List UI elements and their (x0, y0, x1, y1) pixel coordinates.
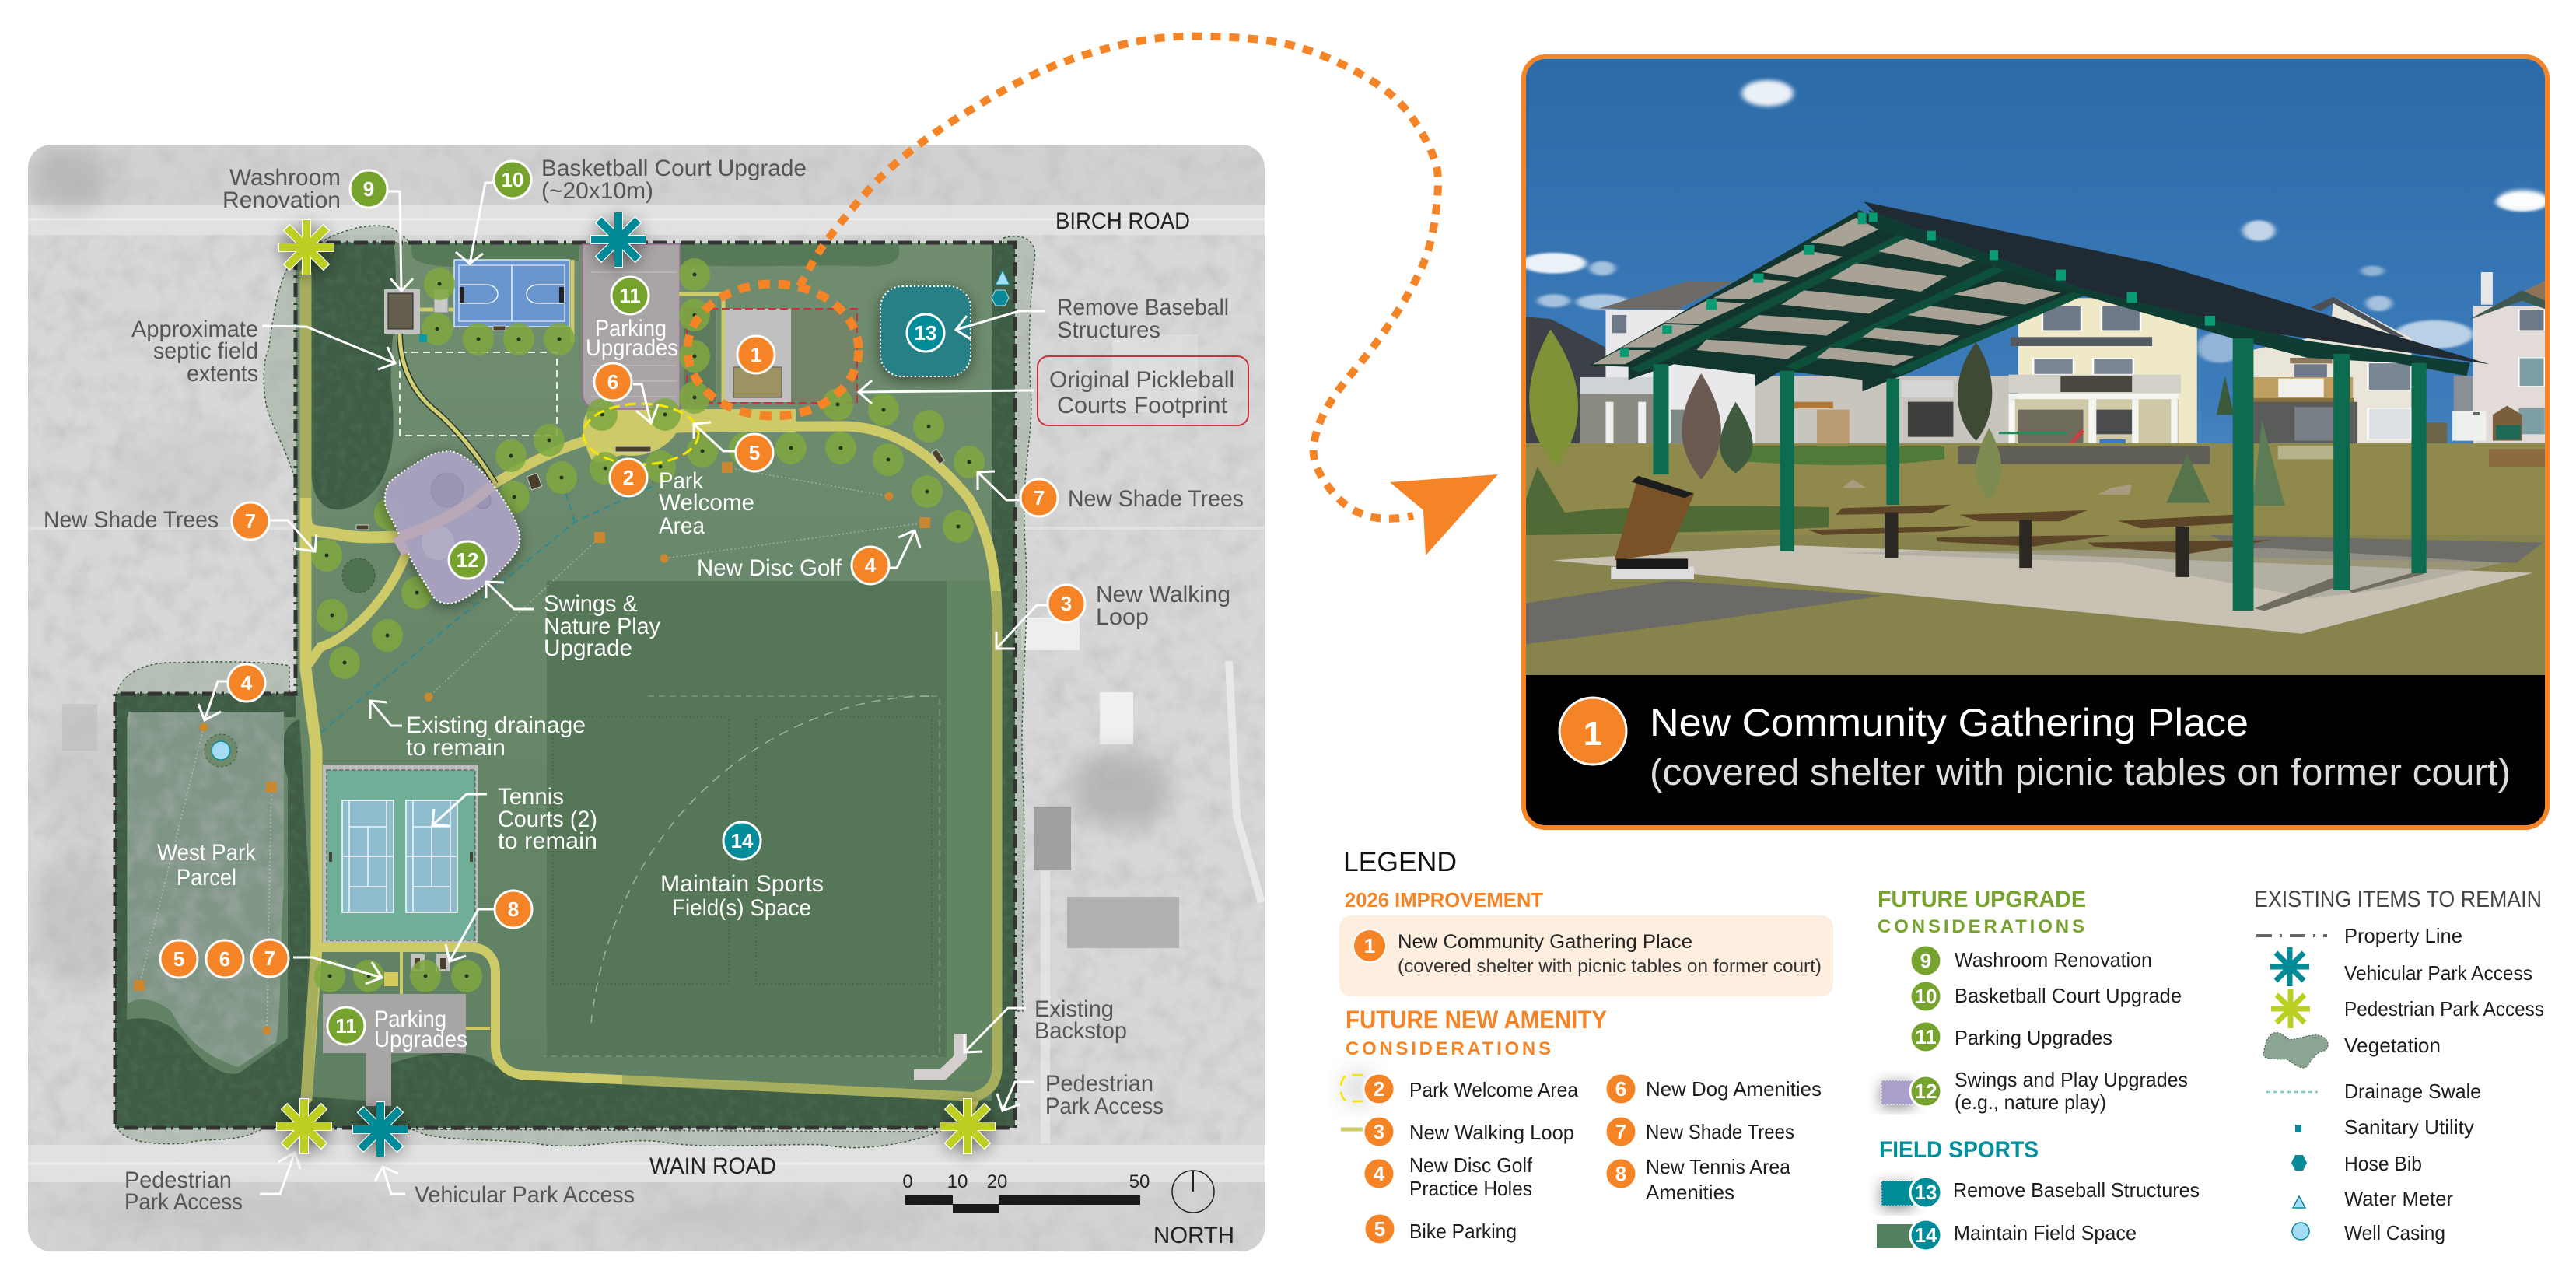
section: existing items to remain: Pedestrian Park Access (2344, 997, 2544, 1020)
section: future new amenity: 8 (1615, 1162, 1626, 1185)
label: septic field: extents (187, 361, 258, 387)
icon: vehicular access north (590, 212, 646, 268)
label: new walking loop: Loop (1096, 604, 1149, 630)
dotted ring around gathering place (688, 284, 859, 416)
background houses (1505, 193, 2551, 451)
panel: photo of community gathering shelter (1505, 57, 2576, 828)
marker 3: 3 (1061, 592, 1072, 615)
park base (115, 243, 1015, 1128)
north tree band (411, 243, 899, 268)
arrow: west disc golf (198, 681, 228, 720)
section: future new amenity: Amenities (1646, 1181, 1734, 1204)
label: washroom renovation: Washroom (229, 165, 341, 191)
narrow washroom path (400, 333, 495, 484)
section: future upgrade: 12 (1915, 1080, 1937, 1103)
section: 2026 improvement: 2026 IMPROVEMENT (1345, 888, 1543, 912)
caption marker 1 (1559, 698, 1626, 765)
marker 9: 9 (363, 177, 374, 201)
swings and nature play area (385, 451, 520, 604)
vegetation edges (117, 226, 1035, 1148)
section: field sports: Remove Baseball Structures (1953, 1178, 2200, 1202)
label: west park parcel (157, 840, 257, 891)
arrow: tennis amenities (446, 909, 495, 961)
disc golf tees and baskets (134, 462, 930, 1034)
marker 4 north: 4 (865, 554, 877, 577)
marker 7 parcel: 7 (264, 947, 275, 970)
section: future upgrade: 10 (1915, 985, 1937, 1008)
label: new walking loop: New Walking (1096, 582, 1230, 607)
west park parcel (128, 712, 284, 1067)
label: pedestrian park access southeast: Park Access (1045, 1094, 1164, 1119)
section: future upgrade: FUTURE UPGRADE (1878, 887, 2086, 912)
section: future new amenity: 3 (1374, 1120, 1384, 1143)
callout: original pickleball courts footprint (1038, 356, 1248, 425)
marker 14 (723, 822, 761, 859)
label: tennis courts (498, 784, 597, 854)
label: swings and nature play: Nature Play (544, 614, 660, 639)
section: existing items to remain: Water Meter (2344, 1187, 2453, 1210)
arrow: dog amenities (633, 384, 658, 423)
arrow: west shade trees (271, 520, 317, 551)
property line (115, 243, 1015, 1128)
section: 2026 improvement: 1 (1364, 934, 1375, 957)
existing backstop (914, 1034, 967, 1080)
marker 12 (449, 541, 486, 579)
label: existing backstop: Existing (1034, 996, 1114, 1022)
section: future new amenity: New Tennis Area (1646, 1155, 1791, 1178)
arrow: backstop (964, 1008, 1026, 1052)
caption marker 1: 1 (1584, 715, 1602, 753)
section: future new amenity (1340, 1006, 1822, 1244)
new walking loop paths (306, 274, 997, 1125)
marker 7 west: 7 (245, 509, 256, 533)
caption title: New Community Gathering Place (1650, 701, 2249, 744)
section: future new amenity: Park Welcome Area (1409, 1078, 1579, 1101)
section: future new amenity: CONSIDERATIONS (1346, 1038, 1551, 1059)
section: 2026 improvement: (covered shelter with picnic tables on former court) (1398, 956, 1822, 977)
section: future new amenity: Practice Holes (1409, 1177, 1532, 1200)
marker 8: 8 (508, 898, 519, 921)
section: 2026 improvement (1339, 888, 1833, 996)
marker 6 north (594, 363, 632, 401)
section: future upgrade: CONSIDERATIONS (1878, 916, 2084, 937)
marker 7 east: 7 (1034, 486, 1045, 509)
marker 13: 13 (915, 321, 936, 345)
marker 7 west (232, 502, 269, 540)
label: washroom renovation: Renovation (222, 187, 341, 213)
arrow: washroom (387, 191, 413, 291)
marker 5 north (736, 434, 773, 471)
label: new shade trees east: New Shade Trees (1068, 486, 1244, 512)
shade trees (311, 258, 985, 992)
north arrow (1153, 1171, 1234, 1248)
label: parking upgrades south: Parking (374, 1006, 446, 1032)
section: existing items to remain: Well Casing (2344, 1221, 2445, 1244)
marker 11 south (327, 1007, 365, 1045)
label: maintain sports field (660, 871, 824, 921)
section: existing items to remain: EXISTING ITEMS TO REMAIN (2254, 887, 2542, 912)
marker 9 (350, 170, 387, 208)
marker 10 (494, 161, 531, 198)
marker 4 west: 4 (241, 671, 253, 695)
label: maintain sports field: Maintain Sports (660, 871, 824, 897)
arrow: pickleball footprint (859, 380, 1034, 404)
section: future new amenity: New Shade Trees (1646, 1120, 1794, 1143)
label: existing drainage: Existing drainage (406, 712, 586, 738)
label: remove baseball structures (1057, 295, 1229, 343)
label: vehicular park access: Vehicular Park Access (415, 1182, 635, 1208)
south paths (401, 947, 490, 1028)
label: wain road: WAIN ROAD (649, 1153, 776, 1179)
marker 1 (737, 336, 775, 373)
forest areas (115, 243, 1015, 1128)
label: west park parcel: West Park (157, 840, 257, 866)
section: future upgrade: 11 (1915, 1025, 1937, 1048)
marker 11 north (611, 277, 649, 314)
marker 11 north: 11 (619, 284, 641, 307)
arrow: south pedestrian (260, 1153, 300, 1194)
icon: vehicular access south (352, 1101, 408, 1157)
section: future new amenity: 5 (1374, 1217, 1385, 1241)
marker 12: 12 (457, 548, 478, 572)
section: field sports: FIELD SPORTS (1879, 1137, 2039, 1163)
arrow: west parcel amenities (293, 957, 382, 984)
label: septic field (131, 317, 258, 387)
former pickleball court (679, 294, 857, 403)
photo border (1524, 57, 2547, 828)
section: 2026 improvement: New Community Gathering Place (1398, 931, 1692, 953)
basketball court (454, 260, 569, 327)
section: future upgrade: Basketball Court Upgrade (1955, 984, 2182, 1007)
marker 6 north: 6 (607, 370, 618, 394)
caption bar (1524, 675, 2547, 828)
photo scene (1505, 57, 2576, 681)
label: new walking loop (1096, 582, 1230, 630)
utilities: water meter and hose bib (419, 271, 1010, 342)
washroom building (384, 289, 420, 334)
label: parking upgrades north (586, 316, 678, 361)
arrowhead (1390, 474, 1498, 555)
label: existing backstop (1034, 996, 1127, 1044)
label: park welcome area: Park (659, 468, 704, 494)
arrow: east shade trees (978, 471, 1020, 500)
path to basketball (420, 308, 454, 311)
section: future upgrade: 9 (1920, 949, 1931, 972)
sports field lines (553, 716, 932, 984)
label: new disc golf: New Disc Golf (697, 555, 842, 581)
section: existing items to remain: Drainage Swale (2344, 1080, 2481, 1103)
section: existing items to remain: Vegetation (2344, 1034, 2441, 1057)
label: septic field: Approximate (131, 317, 258, 342)
well with casing (205, 734, 237, 767)
label: tennis courts: Courts (2) (498, 807, 597, 832)
section: future new amenity: 2 (1374, 1077, 1384, 1101)
scale bar: 0 (902, 1171, 913, 1192)
welcome plaza (583, 408, 796, 462)
label: pedestrian park access south: Pedestrian (124, 1167, 232, 1193)
label: remove baseball structures: Remove Baseball (1057, 295, 1229, 320)
icon: pedestrian access northwest (278, 219, 334, 275)
arrow: south vehicular (375, 1167, 405, 1194)
scale bar: 20 (987, 1171, 1007, 1192)
tennis courts (323, 765, 478, 943)
label: pedestrian park access south (124, 1167, 243, 1215)
section: future upgrade: Parking Upgrades (1955, 1026, 2112, 1049)
label: parking upgrades north: Upgrades (586, 335, 678, 361)
arrow: remove baseball (956, 311, 1045, 339)
marker 4 west (228, 664, 265, 702)
marker 1: 1 (751, 343, 761, 366)
label: washroom renovation (222, 165, 341, 213)
label: basketball court upgrade (541, 156, 807, 204)
icon: pedestrian access southeast (940, 1098, 996, 1154)
label: birch road: BIRCH ROAD (1055, 208, 1190, 234)
section: field sports: 13 (1915, 1181, 1937, 1204)
section: future upgrade: Washroom Renovation (1955, 948, 2152, 971)
section: future new amenity: New Disc Golf (1409, 1153, 1533, 1177)
section: existing items to remain: Property Line (2344, 924, 2462, 947)
label: west park parcel: Parcel (177, 865, 236, 891)
sports field darker zone (547, 581, 947, 1057)
marker 5 west (160, 940, 198, 978)
section: future upgrade: (e.g., nature play) (1955, 1090, 2106, 1114)
section: future new amenity: New Dog Amenities (1646, 1077, 1822, 1101)
section: existing items to remain (2254, 887, 2544, 1244)
callout: original pickleball courts footprint: Courts Footprint (1057, 393, 1228, 418)
label: pedestrian park access south: Park Access (124, 1189, 243, 1215)
disc golf flight lines (139, 467, 925, 1031)
label: swings and nature play: Swings & (544, 591, 638, 617)
south parking lot (323, 994, 466, 1106)
scale bar (902, 1171, 1150, 1213)
panel: site plan map (28, 145, 1265, 1251)
dotted connector line (800, 37, 1438, 519)
marker 5 west: 5 (173, 947, 184, 971)
section: future new amenity: 7 (1615, 1120, 1626, 1143)
marker 8 (495, 891, 532, 928)
marker 2 (610, 459, 647, 496)
arrow: basketball (456, 183, 494, 264)
label: tennis courts: to remain (498, 828, 597, 854)
drainage swale (320, 486, 653, 733)
scale bar: 10 (947, 1171, 968, 1192)
arrow: disc golf (890, 530, 920, 568)
icon: pedestrian access south (276, 1098, 332, 1154)
site furnishings (356, 326, 944, 530)
label: existing backstop: Backstop (1034, 1018, 1127, 1044)
legend heading: LEGEND (1343, 847, 1457, 877)
label: parking upgrades south: Upgrades (374, 1027, 467, 1052)
label: park welcome area: Welcome (659, 490, 754, 516)
section: existing items to remain: Vehicular Park Access (2344, 961, 2532, 985)
marker 7 east (1020, 479, 1058, 516)
section: future new amenity: FUTURE NEW AMENITY (1346, 1006, 1607, 1034)
marker 13 (907, 314, 944, 352)
ground and site in photo (1509, 443, 2576, 681)
arrow: tennis courts (432, 794, 487, 826)
section: field sports: Maintain Field Space (1954, 1221, 2137, 1244)
aerial base map (28, 145, 1265, 1251)
caption subtitle: (covered shelter with picnic tables on former court) (1650, 752, 2511, 793)
marker 14: 14 (731, 829, 754, 852)
label: pedestrian park access southeast (1045, 1071, 1164, 1119)
panel: legend (1339, 847, 2544, 1251)
label: pedestrian park access southeast: Pedestrian (1045, 1071, 1153, 1097)
label: existing drainage (406, 712, 586, 761)
label: tennis courts: Tennis (498, 784, 564, 810)
label: septic field: septic field (153, 338, 258, 364)
label: existing drainage: to remain (406, 735, 506, 761)
arrow: septic field (262, 326, 395, 369)
baseball structures area (880, 286, 971, 376)
label: maintain sports field: Field(s) Space (672, 895, 811, 921)
section: future upgrade: Swings and Play Upgrades (1955, 1068, 2188, 1091)
label: park welcome area: Area (659, 513, 705, 539)
marker 5 north: 5 (749, 441, 760, 464)
vegetation tint over path (306, 274, 997, 1098)
section: existing items to remain: Hose Bib (2344, 1152, 2422, 1175)
section: future new amenity: 4 (1374, 1162, 1385, 1185)
label: new shade trees west: New Shade Trees (44, 507, 219, 533)
label: basketball court upgrade: (~20x10m) (541, 178, 653, 204)
section: field sports: 14 (1915, 1223, 1937, 1247)
arrow: swings (486, 582, 534, 609)
label: parking upgrades south (374, 1006, 467, 1052)
marker 11 south: 11 (335, 1014, 357, 1038)
marker 7 parcel (251, 940, 289, 977)
arrow: bike parking (694, 422, 736, 451)
label: parking upgrades north: Parking (595, 316, 667, 341)
arrow: dotted connector from gathering place to photo (688, 37, 1498, 555)
label: swings and nature play: Upgrade (544, 635, 632, 661)
marker 6 west: 6 (219, 947, 230, 971)
section: field sports (1877, 1137, 2200, 1251)
scale bar: 50 (1129, 1171, 1150, 1192)
septic field extents (400, 352, 557, 436)
callout: original pickleball courts footprint: Original Pickleball (1049, 367, 1234, 393)
welcome area dashed outline (583, 404, 698, 464)
marker 2: 2 (623, 466, 634, 489)
section: future new amenity: 6 (1615, 1077, 1626, 1101)
label: basketball court upgrade: Basketball Court Upgrade (541, 156, 807, 181)
shelter roof and posts (1590, 201, 2490, 611)
label: park welcome area (659, 468, 754, 539)
label: remove baseball structures: Structures (1057, 317, 1160, 343)
north arrow: NORTH (1153, 1223, 1234, 1248)
north parking lot (583, 244, 680, 409)
marker 3 (1048, 585, 1085, 622)
section: existing items to remain: Sanitary Utility (2344, 1115, 2474, 1139)
marker 4 north (852, 547, 889, 584)
label: swings and nature play (544, 591, 660, 661)
arrow: drainage (370, 701, 402, 726)
marker 6 west (206, 940, 243, 978)
arrow: walking loop (996, 605, 1048, 649)
young trees (1518, 329, 2285, 521)
section: future new amenity: New Walking Loop (1409, 1121, 1574, 1144)
arrow: southeast pedestrian (997, 1082, 1034, 1111)
section: future upgrade (1878, 887, 2188, 1114)
marker 10: 10 (502, 168, 523, 191)
section: future new amenity: Bike Parking (1409, 1220, 1517, 1243)
